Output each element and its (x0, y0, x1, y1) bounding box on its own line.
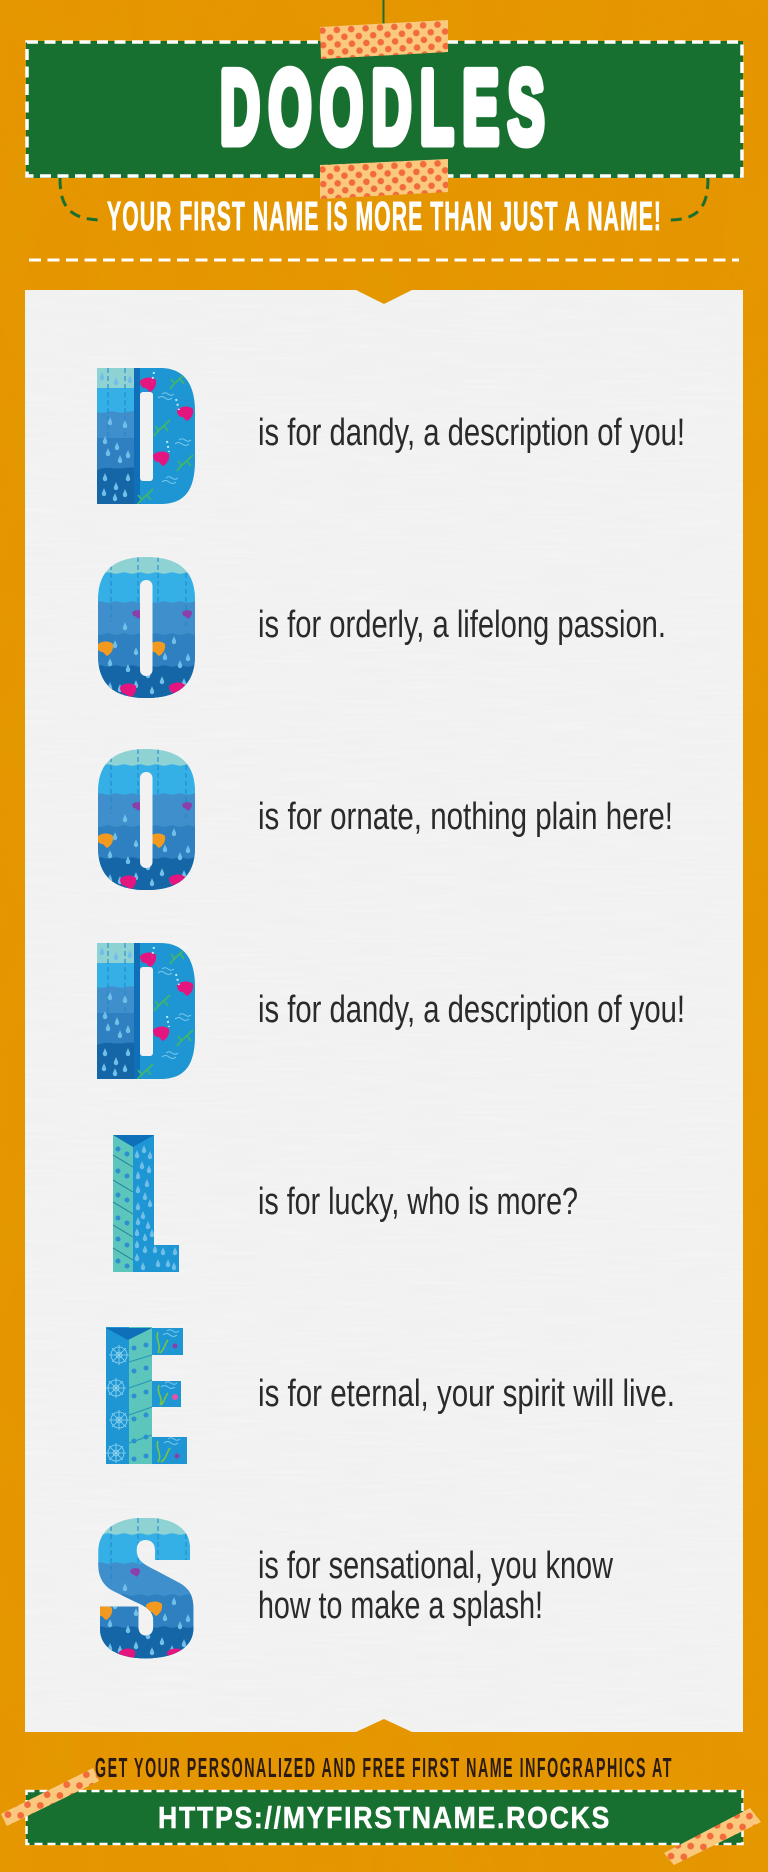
letter L (113, 1135, 179, 1272)
line: S: is for sensational, you know (258, 1545, 613, 1587)
top tape (320, 20, 448, 59)
letter O second (96, 749, 200, 894)
letter D second (97, 943, 197, 1080)
footer banner (26, 1790, 743, 1845)
footer url: HTTPS://MYFIRSTNAME.ROCKS (158, 1800, 611, 1835)
paper texture (365, 295, 402, 1728)
panel background (25, 290, 743, 1732)
letter E (106, 1327, 187, 1464)
letter D (97, 368, 197, 505)
footer right tape (664, 1808, 761, 1865)
letter S (98, 1518, 194, 1658)
left dashed connector (60, 178, 103, 220)
line: L: is for lucky, who is more? (258, 1181, 578, 1223)
right dashed connector (669, 178, 708, 220)
dashed divider (29, 258, 739, 262)
hanging string (382, 0, 384, 24)
footer left tape (1, 1768, 99, 1826)
main panel (25, 290, 743, 1732)
letter O (96, 557, 200, 702)
lower tape (320, 159, 448, 199)
title banner (26, 41, 743, 178)
line: S continued: how to make a splash! (258, 1585, 543, 1627)
